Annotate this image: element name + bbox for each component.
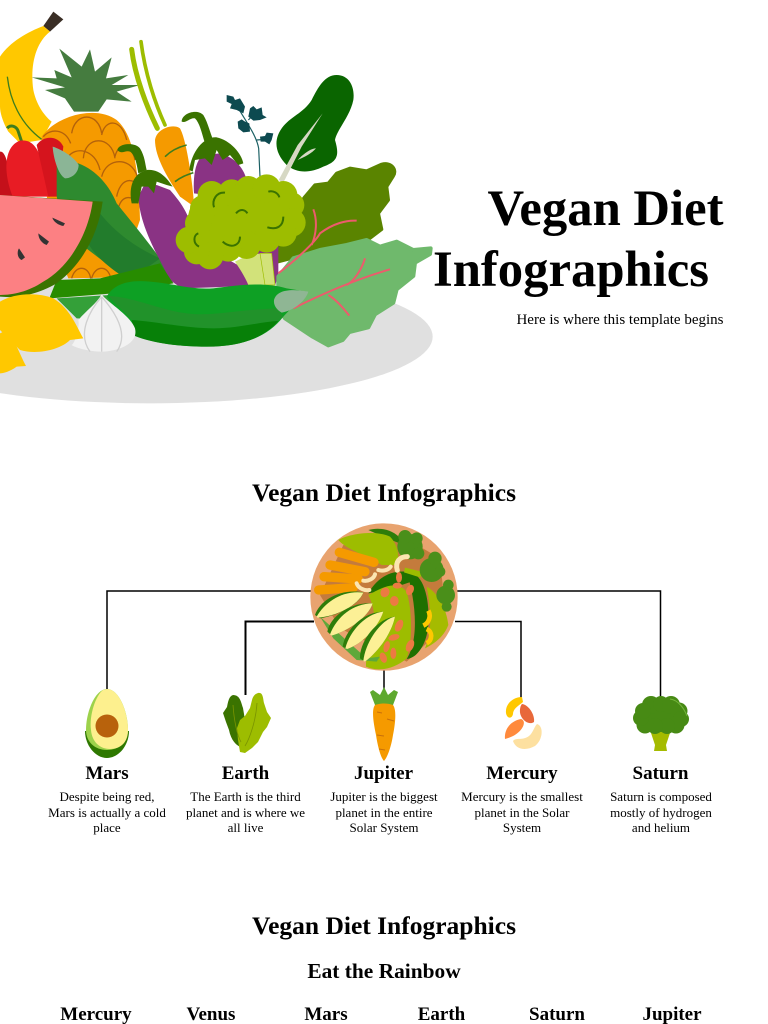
heading: Mercury: Mercury bbox=[486, 763, 558, 784]
description: Mercury: Mercury is the smallest bbox=[461, 789, 583, 804]
carrot top bbox=[132, 42, 194, 207]
subtitle: Here is where this template begins bbox=[516, 312, 724, 328]
description: Mars: place bbox=[93, 820, 121, 835]
front cucumber bbox=[107, 281, 308, 347]
dark leaf bbox=[276, 75, 354, 183]
heading: Earth: Earth bbox=[222, 763, 270, 784]
description: Jupiter: Solar System bbox=[350, 820, 418, 835]
connector lines bbox=[107, 591, 660, 698]
description: Mercury: planet in the Solar bbox=[475, 805, 570, 820]
illustration: vegetable plate bbox=[0, 12, 433, 403]
description: Saturn: and helium bbox=[632, 820, 690, 835]
icon: avocado bbox=[85, 689, 129, 758]
column: Earth bbox=[186, 693, 305, 835]
light green chard leaf bbox=[278, 209, 431, 345]
ground leaves bbox=[50, 263, 173, 320]
big cucumber left bbox=[53, 147, 173, 283]
column labels bbox=[60, 1004, 702, 1024]
description: Saturn: mostly of hydrogen bbox=[610, 805, 712, 820]
description: Mars: Mars is actually a cold bbox=[48, 805, 166, 820]
olive leaf bbox=[278, 164, 395, 262]
parsley sprig bbox=[227, 95, 273, 177]
column: Mars bbox=[48, 689, 166, 835]
back eggplant bbox=[182, 112, 247, 200]
description: Earth: all live bbox=[228, 820, 264, 835]
description: Mercury: System bbox=[503, 820, 541, 835]
yellow cashews bbox=[423, 611, 431, 643]
column: Mercury bbox=[461, 697, 583, 835]
main title: Vegan Diet bbox=[487, 180, 724, 236]
description: Saturn: Saturn is composed bbox=[610, 789, 712, 804]
avocado slices bbox=[315, 592, 395, 662]
front eggplant bbox=[117, 144, 278, 288]
icon: broccoli bbox=[633, 696, 689, 751]
watermelon slice bbox=[0, 195, 103, 297]
icon: carrot bbox=[370, 687, 398, 761]
icon: lettuce leaves bbox=[223, 693, 271, 753]
column: Jupiter bbox=[330, 687, 438, 835]
heading: Mars: Mars bbox=[85, 763, 129, 784]
cashews bbox=[357, 557, 407, 590]
description: Earth: planet and is where we bbox=[186, 805, 305, 820]
red pepper bbox=[0, 126, 63, 197]
subheading: Eat the Rainbow: Eat the Rainbow bbox=[307, 959, 461, 983]
description: Jupiter: planet in the entire bbox=[335, 805, 433, 820]
pineapple bbox=[32, 49, 140, 278]
icon: salad bowl bbox=[310, 523, 458, 671]
broccoli florets bbox=[397, 530, 455, 612]
icon: nuts bbox=[505, 697, 542, 749]
description: Jupiter: Jupiter is the biggest bbox=[330, 789, 438, 804]
description: Mars: Despite being red, bbox=[60, 789, 154, 804]
description: Earth: The Earth is the third bbox=[190, 789, 301, 804]
banana bbox=[0, 12, 63, 143]
section heading: eat the rainbow: Vegan Diet Infographics bbox=[252, 911, 516, 940]
heading: Saturn: Saturn bbox=[633, 763, 689, 784]
plate shadow bbox=[0, 270, 433, 403]
lemons bbox=[0, 294, 83, 373]
column: Saturn bbox=[610, 696, 712, 835]
section heading: diagram: Vegan Diet Infographics bbox=[252, 478, 516, 507]
garlic bbox=[72, 294, 135, 352]
broccoli bbox=[176, 174, 306, 285]
main title bbox=[433, 180, 724, 297]
heading: Jupiter: Jupiter bbox=[354, 763, 414, 784]
almonds bbox=[378, 572, 416, 664]
main title: Infographics bbox=[433, 241, 709, 297]
